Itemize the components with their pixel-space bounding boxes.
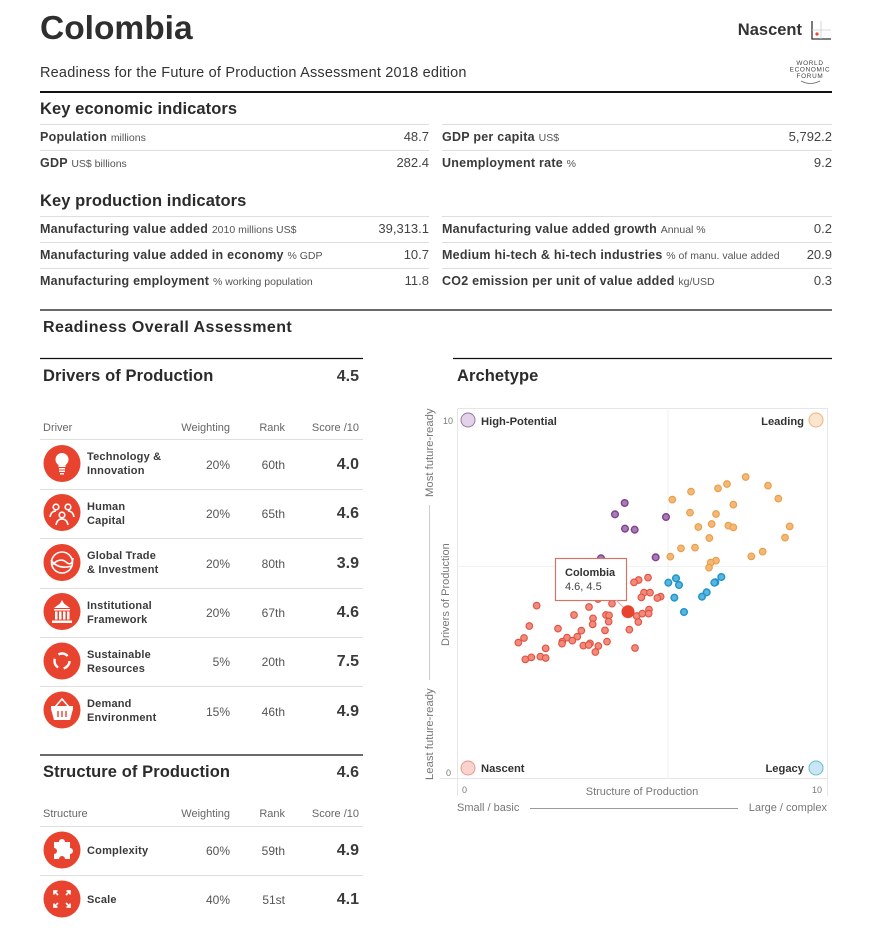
indicator: manufacturing value added: Manufacturing value added 2010 millions US$ — [40, 222, 297, 236]
row: complexity: Complexity — [87, 845, 149, 857]
indicator: CO2 emission: CO2 emission per unit of value added kg/USD — [442, 274, 715, 288]
row: institutional framework: 67th — [262, 606, 285, 620]
x axis labels: Structure of Production — [586, 786, 698, 798]
title: Colombia — [40, 10, 193, 47]
score: structure: 4.6 — [337, 764, 359, 781]
panel: drivers of production — [40, 358, 363, 728]
quadrant: nascent: Nascent — [481, 763, 525, 775]
row: human capital: 20% — [206, 507, 230, 521]
heading: key economic indicators: Key economic indicators — [40, 100, 237, 118]
icon: basket — [44, 692, 80, 728]
scatter plot — [424, 408, 828, 814]
row: scale: 4.1 — [337, 891, 359, 908]
logo: World Economic Forum: ECONOMIC — [790, 66, 830, 74]
callout: Colombia tooltip: 4.6, 4.5 — [565, 581, 602, 593]
indicator: medium hi-tech: 20.9 — [807, 247, 832, 262]
y axis labels: Most future-ready — [424, 408, 436, 497]
row: institutional framework: Institutional — [87, 600, 152, 612]
indicator: GDP: GDP US$ billions — [40, 156, 127, 170]
icon: expand arrows — [44, 880, 80, 918]
row: institutional framework: 20% — [206, 606, 230, 620]
row: complexity: 4.9 — [337, 842, 359, 859]
section: key production indicators — [40, 192, 832, 288]
logo: World Economic Forum: WORLD — [796, 60, 824, 67]
x axis labels: 0 — [462, 785, 467, 795]
panel: structure of production — [40, 755, 363, 918]
y axis labels: Drivers of Production — [440, 543, 452, 646]
row: demand environment: Demand — [87, 698, 132, 710]
table header: structure: Weighting — [181, 808, 230, 820]
icon: archetype mini chart — [812, 21, 831, 39]
archetype label: Nascent: Nascent — [738, 21, 802, 39]
logo: World Economic Forum — [790, 60, 830, 84]
row: human capital: Capital — [87, 515, 125, 527]
indicator: manufacturing value added in economy: Manufacturing value added in economy % GDP — [40, 248, 322, 262]
row: demand environment — [44, 692, 359, 728]
y axis labels: 10 — [443, 416, 453, 426]
indicator: CO2 emission — [442, 273, 832, 288]
indicator: CO2 emission: 0.3 — [814, 273, 832, 288]
indicator: manufacturing value added: 39,313.1 — [378, 221, 429, 236]
row: human capital: 4.6 — [337, 505, 359, 522]
table header: structure: Score /10 — [312, 808, 359, 820]
row: global trade and investment: 3.9 — [337, 555, 359, 572]
x axis labels — [457, 785, 827, 814]
data points: legacy — [665, 574, 725, 615]
row: complexity: 60% — [206, 844, 230, 858]
quadrant: nascent — [461, 761, 525, 775]
indicator: GDP — [40, 155, 429, 170]
x axis labels: Large / complex — [749, 802, 827, 814]
indicator: manufacturing employment — [40, 273, 429, 288]
row: scale — [44, 880, 359, 918]
row: global trade and investment: Global Trade — [87, 550, 156, 562]
indicator: GDP per capita: GDP per capita US$ — [442, 130, 559, 144]
row: scale: Scale — [87, 894, 117, 906]
icon: light bulb — [44, 445, 80, 482]
row: demand environment: 46th — [262, 705, 285, 719]
icon: institution building — [44, 593, 80, 630]
x axis labels: Small / basic — [457, 802, 520, 814]
row: scale: 51st — [262, 893, 286, 907]
table header: drivers: Weighting — [181, 422, 230, 434]
quadrant: high-potential: High-Potential — [481, 416, 557, 428]
icon: people — [44, 494, 80, 531]
row: human capital — [44, 494, 359, 531]
heading: drivers of production: Drivers of Production — [43, 367, 213, 385]
indicator: unemployment rate — [442, 155, 832, 170]
data points: nascent — [515, 574, 664, 663]
table header: drivers — [43, 422, 359, 434]
row: technology and innovation: Innovation — [87, 465, 145, 477]
row: sustainable resources: Resources — [87, 663, 145, 675]
heading: key production indicators: Key production indicators — [40, 192, 246, 210]
icon: puzzle piece — [44, 832, 80, 868]
row: sustainable resources: 7.5 — [337, 653, 359, 670]
row: demand environment: Environment — [87, 712, 157, 724]
callout: Colombia tooltip: Colombia — [565, 567, 616, 579]
heading: readiness overall assessment: Readiness Overall Assessment — [43, 319, 292, 336]
table header: drivers: Driver — [43, 422, 73, 434]
row: global trade and investment: & Investment — [87, 564, 159, 576]
row: sustainable resources: 20th — [262, 655, 285, 669]
panel: archetype — [424, 358, 832, 814]
row: global trade and investment — [44, 544, 359, 581]
callout: Colombia tooltip — [556, 558, 628, 612]
icon: recycling loop — [44, 642, 80, 680]
data points: leading — [667, 474, 793, 571]
row: technology and innovation: Technology & — [87, 451, 161, 463]
icon: globe with arrows — [44, 544, 80, 581]
indicator: population — [40, 129, 429, 144]
quadrant: legacy: Legacy — [765, 763, 805, 775]
indicator: GDP per capita: 5,792.2 — [789, 129, 832, 144]
row: human capital: 65th — [262, 507, 285, 521]
indicator: GDP: 282.4 — [396, 155, 429, 170]
row: technology and innovation: 20% — [206, 458, 230, 472]
row: human capital: Human — [87, 501, 125, 513]
indicator: GDP per capita — [442, 129, 832, 144]
row: scale: 40% — [206, 893, 230, 907]
quadrant: leading: Leading — [761, 416, 804, 428]
quadrant: leading — [761, 413, 823, 428]
section: key economic indicators — [40, 100, 832, 170]
indicator: unemployment rate: 9.2 — [814, 155, 832, 170]
subtitle: Readiness for the Future of Production Assessment 2018 edition — [40, 65, 467, 81]
table header: drivers: Rank — [259, 422, 285, 434]
row: institutional framework: 4.6 — [337, 604, 359, 621]
logo: World Economic Forum: FORUM — [797, 73, 823, 80]
table header: structure: Rank — [259, 808, 285, 820]
y axis labels: 0 — [446, 768, 451, 778]
y axis labels: Least future-ready — [424, 688, 436, 780]
row: technology and innovation: 4.0 — [337, 456, 359, 473]
row: demand environment: 4.9 — [337, 703, 359, 720]
row: technology and innovation: 60th — [262, 458, 285, 472]
indicator: manufacturing value added in economy — [40, 247, 429, 262]
indicator: unemployment rate: Unemployment rate % — [442, 156, 576, 170]
indicator: manufacturing value added — [40, 221, 429, 236]
heading: structure of production: Structure of Production — [43, 763, 230, 781]
quadrant: legacy — [765, 761, 823, 775]
row: complexity: 59th — [262, 844, 285, 858]
indicator: manufacturing value added in economy: 10.7 — [404, 247, 429, 262]
row: complexity — [44, 832, 359, 868]
indicator: population: Population millions — [40, 130, 146, 144]
quadrant: high-potential — [461, 413, 557, 428]
data point: Colombia highlight — [622, 605, 634, 618]
row: institutional framework: Framework — [87, 614, 148, 626]
row: sustainable resources: Sustainable — [87, 649, 151, 661]
row: demand environment: 15% — [206, 705, 230, 719]
row: technology and innovation — [44, 445, 359, 482]
data points: high-potential — [598, 500, 669, 562]
indicator: medium hi-tech: Medium hi-tech & hi-tech industries % of manu. value added — [442, 248, 780, 262]
row: sustainable resources — [44, 642, 359, 680]
indicator: manufacturing employment: 11.8 — [405, 273, 429, 288]
y axis labels — [424, 408, 453, 780]
row: sustainable resources: 5% — [213, 655, 230, 669]
indicator: manufacturing value added growth: 0.2 — [814, 221, 832, 236]
row: institutional framework — [44, 593, 359, 630]
indicator: population: 48.7 — [404, 129, 429, 144]
indicator: manufacturing employment: Manufacturing employment % working population — [40, 274, 313, 288]
table header: drivers: Score /10 — [312, 422, 359, 434]
table header: structure — [43, 808, 359, 820]
table header: structure: Structure — [43, 808, 88, 820]
indicator: manufacturing value added growth: Manufacturing value added growth Annual % — [442, 222, 706, 236]
row: global trade and investment: 20% — [206, 557, 230, 571]
row: global trade and investment: 80th — [262, 557, 285, 571]
indicator: manufacturing value added growth — [442, 221, 832, 236]
score: drivers: 4.5 — [337, 368, 359, 385]
x axis labels: 10 — [812, 785, 822, 795]
heading: archetype: Archetype — [457, 367, 538, 385]
